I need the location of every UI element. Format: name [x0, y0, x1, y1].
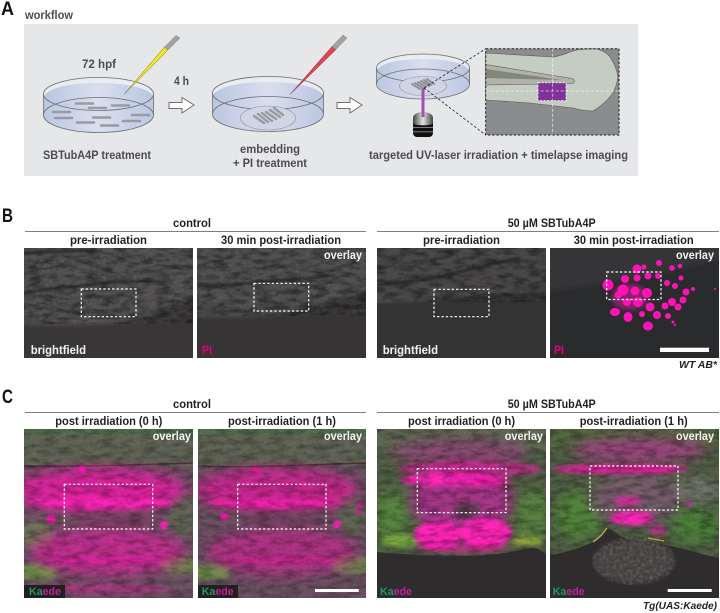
label: targeted UV-laser irradiation + timelapse imaging: targeted UV-laser irradiation + timelapse imaging [369, 150, 628, 162]
PI label: PI [554, 345, 564, 357]
overlay label: overlay [324, 250, 363, 262]
column heading: post irradiation 0 h: post irradiation (0 h) [55, 416, 162, 428]
PI label: PI [202, 345, 212, 357]
heading: control: control [173, 399, 211, 411]
arrow 2 [337, 98, 362, 113]
scale bar [668, 589, 712, 592]
column heading: 30 min post-irradiation treated: 30 min post-irradiation [574, 235, 694, 247]
overlay label: overlay [324, 431, 363, 443]
petri dish on microscope [376, 54, 470, 99]
image: treated pre-irradiation brightfield [377, 248, 546, 358]
genotype label: WT AB*: WT AB* [679, 359, 718, 371]
overlay label: overlay [676, 431, 715, 443]
workflow background [24, 24, 638, 176]
column heading: post-irradiation 1 h: post-irradiation (1 h) [228, 416, 336, 428]
label: 4 h: 4 h [174, 76, 189, 88]
scale bar [660, 348, 709, 352]
objective lens with UV beam [413, 88, 433, 137]
label: embedding + PI treatment [233, 144, 307, 170]
region of interest box [434, 289, 489, 317]
column heading: post irradiation 0 h treated: post irradiation (0 h) [408, 416, 515, 428]
label: SBTubA4P treatment: SBTubA4P treatment [43, 150, 151, 162]
label: embedding + PI treatment: + PI treatment [233, 158, 307, 170]
label: embedding + PI treatment: embedding [240, 144, 300, 156]
inset: larval tail diagram [486, 49, 619, 135]
scale bar [315, 589, 359, 592]
overlay label: overlay [505, 431, 544, 443]
panel A: workflow [1, 0, 638, 176]
image: control 0 h overlay [24, 429, 193, 598]
image: control pre-irradiation brightfield [24, 248, 193, 358]
petri dish with larvae [44, 78, 154, 133]
region of interest box [254, 283, 309, 311]
genotype label: Tg(UAS:Kaede): Tg(UAS:Kaede) [643, 600, 717, 612]
red pipette [290, 35, 347, 94]
heading: 50 µM SBTubA4P: 50 µM SBTubA4P [508, 218, 596, 230]
petri dish embedded [212, 76, 324, 132]
panel letter C: C [2, 387, 13, 408]
magenta photoconverted cells [553, 438, 708, 535]
zoom guide lines [424, 49, 486, 135]
panel letter B: B [2, 206, 13, 227]
magenta photoconverted cells [392, 439, 542, 553]
dark background below tissue [377, 548, 546, 598]
overlay label: overlay [153, 431, 192, 443]
region of interest box [417, 469, 506, 513]
region of interest box [81, 289, 136, 317]
label: 72 hpf: 72 hpf [82, 59, 116, 71]
Kaede label: Kaede [29, 586, 61, 598]
heading: 50 µM SBTubA4P: 50 µM SBTubA4P [508, 399, 596, 411]
Kaede label: Kaede [380, 586, 412, 598]
Kaede label: Kaede [202, 586, 234, 598]
PI positive cells [602, 260, 716, 330]
column heading: 30 min post-irradiation: 30 min post-irradiation [221, 235, 341, 247]
region of interest box [64, 484, 153, 529]
Kaede label: Kaede [553, 586, 585, 598]
column heading: post-irradiation 1 h treated: post-irradiation (1 h) [580, 416, 688, 428]
magenta photoconverted bands [194, 467, 363, 576]
yellow pipette [124, 36, 180, 94]
dark background and extruded cells [550, 528, 719, 598]
column heading: pre-irradiation treated: pre-irradiation [423, 235, 500, 247]
image: treated 1 h overlay [550, 429, 720, 598]
magenta photoconverted bands [14, 466, 186, 594]
region of interest box [238, 484, 326, 529]
region of interest box [590, 466, 678, 510]
image: treated 0 h overlay [372, 429, 550, 598]
brightfield label: brightfield [31, 345, 86, 357]
overlay label: overlay [676, 250, 715, 262]
panel B: PI staining [2, 206, 720, 371]
panel C: Kaede photoconversion [2, 387, 720, 612]
workflow heading: workflow [24, 10, 73, 22]
arrow 1 [169, 98, 194, 113]
region of interest box [607, 272, 661, 300]
heading: control: control [173, 218, 211, 230]
column heading: pre-irradiation: pre-irradiation [70, 235, 147, 247]
image: control 1 h overlay [188, 429, 372, 598]
brightfield label: brightfield [383, 345, 438, 357]
irradiated region [538, 83, 566, 101]
image: control post-irradiation PI overlay [197, 248, 366, 358]
image: treated post-irradiation PI overlay [550, 248, 719, 358]
